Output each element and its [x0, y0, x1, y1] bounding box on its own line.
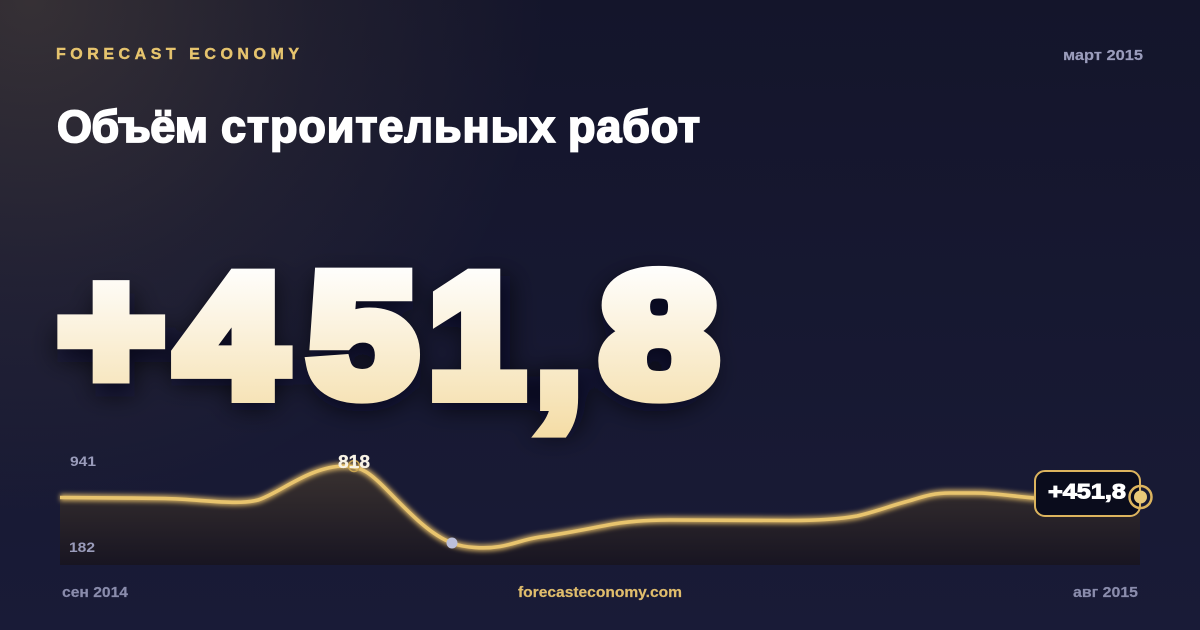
minimum marker [446, 538, 458, 548]
source link: forecasteconomy.com [518, 584, 682, 601]
value badge: +451,8 [1048, 480, 1126, 504]
headline value: 8 [601, 239, 717, 431]
axis max label: 941 [70, 453, 96, 469]
value badge [1035, 471, 1140, 516]
title: работ [568, 101, 700, 152]
headline value: +451,8 [58, 246, 709, 439]
headline value: , [536, 249, 581, 440]
headline value: + [58, 234, 164, 426]
peak marker [348, 460, 360, 472]
line glow [60, 466, 1140, 548]
peak value: 818 [338, 452, 370, 472]
trend line [60, 466, 1140, 548]
headline value: 1 [429, 240, 524, 432]
end marker [1130, 486, 1152, 508]
headline value: 5 [309, 239, 416, 431]
end date: авг 2015 [1073, 584, 1138, 601]
start date: сен 2014 [62, 584, 129, 601]
date label: март 2015 [1063, 47, 1143, 64]
brand label: FORECAST ECONOMY [56, 46, 299, 63]
title: строительных [221, 101, 555, 152]
headline value: 4 [177, 239, 285, 432]
chart area fill [60, 466, 1140, 565]
axis min label: 182 [69, 539, 95, 555]
sparkline chart [60, 452, 1152, 565]
title: Объём [57, 101, 208, 152]
